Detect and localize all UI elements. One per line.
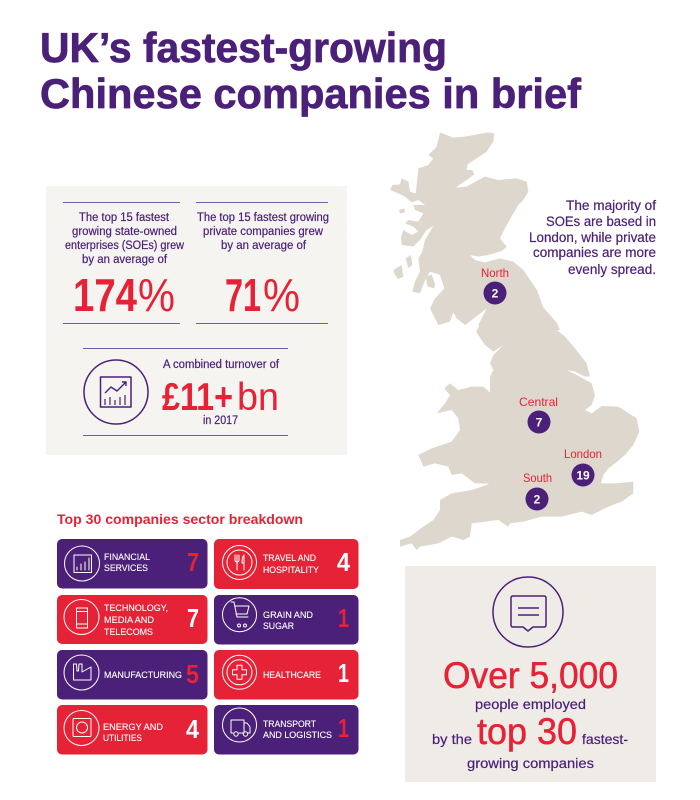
statistic: 71%: %	[263, 269, 300, 321]
text: people employed: people employed	[475, 696, 586, 712]
text: state-owned enterprises growth: enterprises (SOEs) grew	[65, 240, 185, 252]
text: state-owned enterprises growth: by an average of	[82, 254, 168, 266]
card: technology, media and telecoms: TELECOMS	[104, 627, 153, 638]
text: by the top 30 fastest: top 30	[477, 711, 577, 752]
map marker: London: London	[564, 447, 602, 461]
map marker: London	[564, 447, 602, 486]
card: energy and utilities: UTILITIES	[103, 733, 142, 744]
card: travel and hospitality: HOSPITALITY	[263, 565, 320, 576]
statistic: £11+bn: £11+	[162, 376, 233, 419]
card: manufacturing	[57, 650, 208, 700]
map marker: South: South	[523, 471, 552, 485]
card: grain and sugar: SUGAR	[263, 621, 294, 632]
callout: SOE distribution: London, while private	[529, 230, 656, 245]
panel: employment	[405, 566, 656, 782]
card: travel and hospitality	[214, 539, 358, 589]
text: private companies growth	[197, 212, 329, 252]
statistic: 174%: 174	[73, 269, 137, 321]
card: technology, media and telecoms: MEDIA AND	[104, 615, 154, 626]
text: state-owned enterprises growth: growing state-owned	[72, 226, 177, 238]
card: transport and logistics: AND LOGISTICS	[263, 730, 332, 741]
card: manufacturing: MANUFACTURING	[104, 670, 182, 681]
card: technology, media and telecoms	[57, 595, 208, 644]
heading: sector breakdown: Top 30 companies sector breakdown	[57, 512, 303, 527]
card: energy and utilities: 4	[186, 714, 199, 744]
map marker: North	[481, 266, 509, 304]
callout: SOE distribution: SOEs are based in	[546, 214, 656, 229]
callout: SOE distribution: The majority of	[566, 198, 656, 213]
card: technology, media and telecoms: 7	[187, 603, 199, 633]
statistic: £11+bn: bn	[237, 376, 279, 419]
text: combined turnover: A combined turnover of	[163, 359, 280, 371]
text: private companies growth: The top 15 fastest growing	[197, 212, 329, 224]
map marker: South: 2	[534, 492, 541, 506]
card: financial services	[57, 539, 208, 588]
title: Chinese companies in brief	[40, 70, 582, 117]
card: transport and logistics	[214, 705, 358, 754]
card: grain and sugar	[214, 595, 358, 644]
map marker: South	[523, 471, 552, 510]
card: grain and sugar: GRAIN AND	[263, 610, 313, 621]
card: manufacturing: 5	[186, 659, 199, 689]
panel: growth statistics	[46, 186, 347, 455]
text: state-owned enterprises growth: The top 15 fastest	[79, 212, 170, 224]
text: growing companies: growing companies	[467, 755, 594, 771]
card: financial services: FINANCIAL	[104, 552, 150, 563]
card: healthcare: HEALTHCARE	[263, 670, 321, 681]
card: healthcare	[214, 650, 358, 700]
card: travel and hospitality: TRAVEL AND	[263, 553, 316, 564]
map of Great Britain	[390, 132, 639, 550]
callout: SOE distribution: evenly spread.	[568, 262, 656, 277]
map marker: North: 2	[492, 286, 499, 300]
map marker: North: North	[481, 266, 509, 280]
text: state-owned enterprises growth	[65, 212, 185, 266]
card: transport and logistics: TRANSPORT	[263, 719, 316, 730]
text: by the top 30 fastest: fastest-	[582, 731, 628, 747]
card: financial services: 7	[187, 547, 199, 577]
card: technology, media and telecoms: TECHNOLOGY,	[104, 603, 168, 614]
statistic: 71%: 71	[225, 269, 261, 321]
text: private companies growth: private companies grew	[203, 226, 324, 238]
icon: chart in circle	[84, 360, 148, 424]
map marker: Central	[519, 395, 558, 434]
icon: speech bubble in circle	[493, 577, 563, 647]
card: energy and utilities: ENERGY AND	[103, 722, 163, 733]
map marker: Central: 7	[536, 416, 543, 430]
card: transport and logistics: 1	[338, 713, 349, 743]
map marker: Central: Central	[519, 395, 558, 409]
text: in 2017: in 2017	[203, 415, 238, 427]
title	[40, 24, 582, 117]
statistic: over 5,000: Over 5,000	[443, 655, 618, 696]
text: by the top 30 fastest: by the	[432, 731, 472, 747]
callout: SOE distribution	[529, 198, 656, 277]
statistic: 71%	[225, 269, 300, 321]
callout: SOE distribution: companies are more	[533, 245, 656, 260]
card: financial services: SERVICES	[104, 563, 148, 574]
title: UK’s fastest-growing	[40, 24, 447, 71]
statistic: 174%: %	[138, 269, 175, 321]
map marker: London: 19	[576, 468, 590, 482]
card: travel and hospitality: 4	[337, 547, 350, 577]
text: by the top 30 fastest	[432, 711, 628, 752]
card: energy and utilities	[57, 705, 208, 754]
card: healthcare: 1	[338, 658, 349, 688]
text: private companies growth: by an average of	[221, 240, 307, 252]
card: grain and sugar: 1	[338, 603, 349, 633]
